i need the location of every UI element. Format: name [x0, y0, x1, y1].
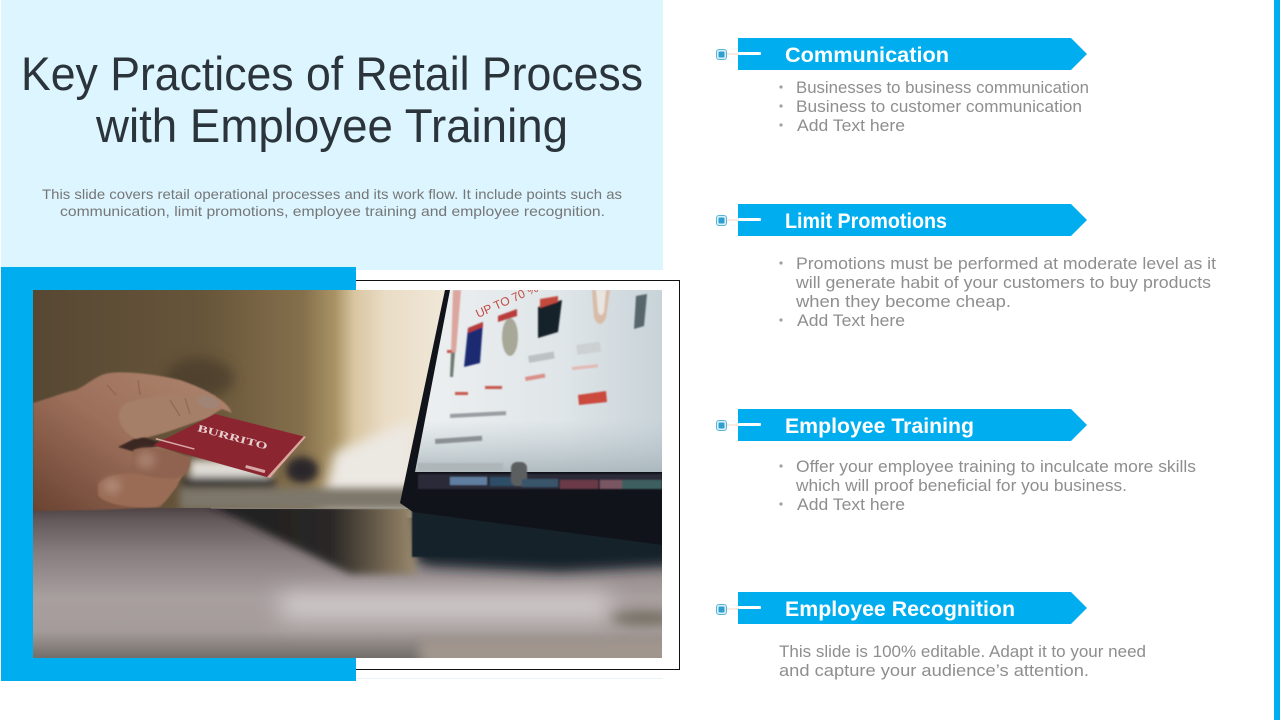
bullet list — [779, 254, 1216, 330]
right edge accent bar — [1274, 0, 1280, 720]
paragraph — [779, 642, 1146, 680]
title: Key Practices of Retail Process — [21, 47, 643, 100]
item: Limit Promotions — [716, 204, 1216, 330]
laptop screen — [414, 290, 662, 474]
credit card: BURRITO — [196, 423, 269, 453]
connector icon — [716, 420, 738, 430]
sharp edge at laptop — [411, 510, 430, 558]
laptop dock strip — [418, 462, 662, 489]
bullet list — [779, 457, 1196, 514]
bullet list: Offer your employee training to inculcate more skills — [796, 457, 1196, 476]
table lower right shadow — [611, 612, 679, 624]
item: Communication: Communication — [785, 44, 949, 67]
window glare behind card — [320, 420, 415, 510]
screen content: products — [418, 290, 647, 471]
screen heading: red sale banner: UP TO 70 % OFF — [474, 270, 565, 321]
bullet list: Businesses to business communication — [796, 78, 1089, 97]
heading banner — [738, 592, 1087, 624]
paragraph: This slide is 100% editable. Adapt it to your need — [779, 642, 1146, 661]
lower finger — [98, 474, 178, 507]
bullet list: Add Text here — [797, 311, 905, 330]
bullet list: will generate habit of your customers to buy products — [795, 273, 1211, 292]
blue photo backing block — [1, 267, 356, 681]
description text — [42, 186, 622, 219]
lower right tone — [414, 640, 662, 658]
paragraph: and capture your audience’s attention. — [779, 661, 1089, 680]
middle finger — [130, 447, 190, 478]
title — [21, 47, 643, 152]
hand base — [33, 372, 232, 511]
table surface — [33, 508, 662, 658]
item: Limit Promotions: Limit Promotions — [785, 210, 947, 233]
blurred table foreground highlight — [280, 594, 610, 618]
heading banner — [738, 204, 1087, 236]
laptop keyboard and base, fading into the foreground — [205, 500, 680, 574]
background desk clutter — [180, 457, 420, 510]
screen lower shade — [415, 429, 662, 472]
thumbnail — [198, 396, 218, 408]
bullet list: Add Text here — [797, 495, 905, 514]
faint line under frame — [356, 678, 663, 679]
connector icon — [716, 216, 738, 226]
description text: communication, limit promotions, employee training and employee recognition. — [60, 203, 605, 219]
item: Employee Recognition: Employee Recognition — [785, 598, 1015, 621]
panel: title background — [1, 0, 663, 270]
middle fingernail — [136, 451, 156, 469]
laptop keyboard — [205, 502, 416, 574]
bullet list: when they become cheap. — [795, 292, 1011, 311]
finger shadow — [118, 436, 160, 452]
title: with Employee Training — [95, 99, 568, 152]
bullet list: Add Text here — [797, 116, 905, 135]
item: Employee Training: Employee Training — [785, 415, 974, 438]
connector icon — [716, 604, 738, 614]
knuckle creases — [107, 380, 190, 416]
lower fingernail — [103, 478, 121, 494]
item: Employee Recognition — [716, 592, 1146, 680]
laptop base, dark — [414, 500, 680, 572]
item: Communication — [716, 38, 1089, 135]
bullet list — [779, 78, 1089, 135]
heading banner — [738, 38, 1087, 70]
bullet list: Promotions must be performed at moderate level as it — [796, 254, 1216, 273]
description text: This slide covers retail operational processes and its work flow. It include points such as — [42, 186, 622, 202]
bullet list: Business to customer communication — [796, 97, 1082, 116]
laptop bezel — [400, 290, 662, 545]
thumb — [119, 393, 220, 439]
photo: hand holding card in front of laptop — [33, 290, 662, 658]
credit card — [153, 414, 306, 478]
heading banner — [738, 409, 1087, 441]
keyboard highlights — [211, 508, 405, 509]
connector icon — [716, 50, 738, 60]
photo frame outline — [340, 280, 680, 670]
item: Employee Training — [716, 409, 1196, 514]
bullet list: which will proof beneficial for you business. — [795, 476, 1127, 495]
blurred object behind hand — [166, 358, 234, 398]
